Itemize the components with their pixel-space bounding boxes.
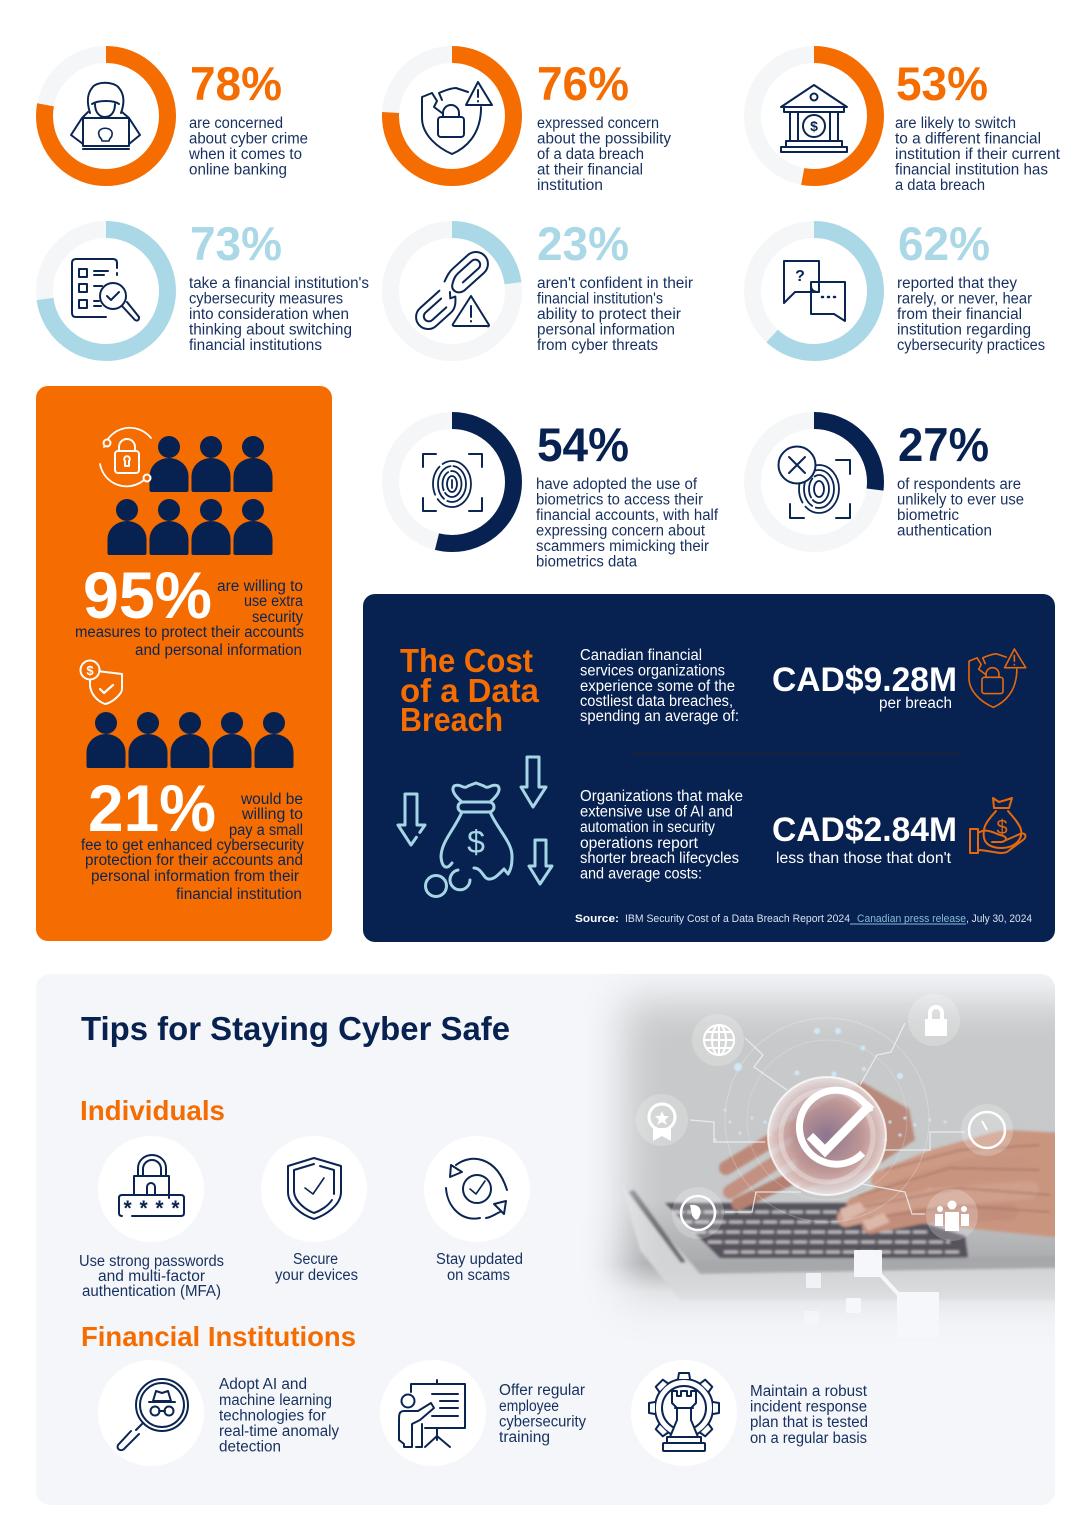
text: 78% description: online banking bbox=[189, 162, 287, 178]
text: 73% description: cybersecurity measures bbox=[189, 290, 343, 308]
text: 54% description: biometrics to access their bbox=[536, 492, 703, 508]
figure 95%: 95% bbox=[83, 558, 212, 632]
stat: 53% likely to switch bbox=[752, 54, 1061, 194]
text: 27% description: authentication bbox=[897, 522, 992, 540]
text: passwords tip bbox=[79, 1253, 224, 1300]
text: AI tip: technologies for bbox=[219, 1408, 326, 1424]
text: less than those that don't: less than those that don't bbox=[776, 850, 952, 867]
text: 54% description: expressing concern about bbox=[536, 522, 706, 540]
text: 95% description: use extra bbox=[244, 593, 303, 610]
text: 21% description: financial institution bbox=[176, 886, 302, 903]
text: 95% description: security bbox=[252, 609, 303, 626]
donut chart 76% bbox=[390, 54, 514, 178]
text: AI tip: Adopt AI and bbox=[219, 1376, 307, 1393]
text: 27% description: unlikely to ever use bbox=[897, 492, 1024, 508]
icon: lock with password: **** bbox=[124, 1197, 180, 1220]
text: 54% description: scammers mimicking their bbox=[536, 538, 709, 555]
panel background bbox=[36, 974, 1055, 1505]
icon: shield with check bbox=[261, 1136, 367, 1242]
text: 23% description: ability to protect their bbox=[537, 306, 681, 323]
icon: question and answer speech bubbles bbox=[784, 261, 845, 321]
text: scams tip: Stay updated bbox=[436, 1251, 523, 1268]
figure 27%: 27% bbox=[898, 418, 989, 471]
text: incident response tip bbox=[750, 1383, 868, 1447]
text: 53% description bbox=[895, 115, 1061, 194]
icon: orange hand holding money bag bbox=[970, 798, 1025, 853]
icon: checklist with magnifier bbox=[72, 259, 139, 321]
text: 54% description: biometrics data bbox=[536, 554, 637, 570]
stat: 73% consider cybersecurity bbox=[44, 217, 369, 354]
text: incident response tip: Maintain a robust bbox=[750, 1383, 868, 1400]
text: 73% description: into consideration when bbox=[189, 306, 349, 323]
panel: tips for staying cyber safe bbox=[36, 960, 1080, 1505]
text: 62% description: cybersecurity practices bbox=[897, 337, 1045, 354]
text: cost intro: spending an average of: bbox=[580, 708, 739, 725]
text: devices tip: Secure bbox=[293, 1251, 338, 1268]
figure 53%: 53% bbox=[896, 57, 988, 110]
donut chart 54% bbox=[390, 420, 514, 544]
text: AI and automation: shorter breach lifecycles bbox=[580, 850, 739, 867]
icon: question and answer speech bubbles: ? bbox=[795, 268, 805, 285]
text: passwords tip: and multi-factor bbox=[98, 1268, 205, 1285]
text: 21% description: protection for their accounts and bbox=[85, 852, 303, 869]
text: 78% description: when it comes to bbox=[188, 146, 302, 163]
stat: 76% data breach concern bbox=[390, 54, 671, 194]
text: 27% description: of respondents are bbox=[897, 476, 1021, 493]
heading: Tips for Staying Cyber Safe: Tips for Staying Cyber Safe bbox=[81, 1010, 510, 1047]
text: 62% description bbox=[897, 275, 1045, 354]
text: AI and automation: operations report bbox=[580, 835, 699, 852]
stat: 27% unlikely to use biometrics bbox=[752, 418, 1024, 544]
text: 21% description: willing to bbox=[241, 806, 303, 823]
icon: bank building with dollar bbox=[781, 85, 847, 152]
tip: strong passwords and MFA bbox=[79, 1136, 224, 1300]
icon: bank building with dollar: $ bbox=[810, 118, 818, 134]
source citation: , July 30, 2024 bbox=[966, 913, 1032, 925]
people icons: 21% group bbox=[86, 712, 294, 768]
panel title: of a Data bbox=[400, 672, 540, 709]
icon: presenter with board bbox=[380, 1360, 486, 1466]
icon: broken chain with warning bbox=[411, 247, 493, 334]
text: 27% description bbox=[897, 476, 1024, 540]
panel title: Breach bbox=[400, 701, 503, 738]
text: cost intro: experience some of the bbox=[580, 678, 735, 695]
text: 62% description: reported that they bbox=[897, 275, 1017, 292]
text: 23% description: personal information bbox=[537, 322, 675, 338]
donut chart 78% bbox=[44, 54, 168, 178]
panel: orange willingness stats bbox=[36, 386, 332, 941]
figure 78%: 78% bbox=[190, 57, 282, 110]
figure 21%: 21% bbox=[88, 771, 216, 845]
donut chart 73% bbox=[44, 230, 168, 352]
text: 95% description: measures to protect their accounts bbox=[75, 624, 304, 641]
text: 73% description: take a financial institution's bbox=[189, 275, 369, 292]
figure CAD$2.84M: CAD$2.84M bbox=[772, 811, 957, 849]
icon: hooded hacker with laptop bbox=[71, 83, 140, 149]
stat: 23% not confident bbox=[390, 217, 693, 354]
text: 78% description: about cyber crime bbox=[189, 130, 308, 148]
text: incident response tip: plan that is tested bbox=[750, 1414, 868, 1431]
text: scams tip: on scams bbox=[447, 1267, 510, 1284]
icon: broken shield with lock bbox=[422, 82, 492, 154]
heading: Financial Institutions: Financial Institutions bbox=[81, 1321, 356, 1352]
text: cost intro: costliest data breaches, bbox=[580, 693, 733, 710]
text: 53% description: to a different financial bbox=[895, 130, 1041, 148]
text: cost intro: Canadian financial bbox=[580, 647, 702, 664]
figure 23%: 23% bbox=[537, 217, 629, 270]
donut chart 27% bbox=[752, 420, 876, 544]
text: 54% description bbox=[536, 476, 719, 570]
text: passwords tip: Use strong passwords bbox=[79, 1253, 224, 1270]
figure CAD$9.28M: CAD$9.28M bbox=[772, 661, 957, 699]
text: passwords tip: authentication (MFA) bbox=[82, 1283, 221, 1300]
text: AI and automation: Organizations that make bbox=[580, 788, 743, 805]
text: AI and automation bbox=[580, 788, 743, 882]
text: 23% description: aren't confident in their bbox=[537, 275, 693, 292]
text: devices tip bbox=[275, 1251, 358, 1284]
text: 21% description: personal information from their bbox=[91, 868, 299, 885]
text: 21% description: would be bbox=[240, 791, 303, 808]
decorative white squares bbox=[804, 1250, 939, 1338]
icon: orange broken shield bbox=[969, 649, 1026, 707]
text: 76% description bbox=[537, 115, 671, 194]
stat: 78% concerned about cyber crime bbox=[44, 54, 308, 178]
text: training tip: cybersecurity bbox=[499, 1414, 586, 1430]
text: 21% description: pay a small bbox=[229, 822, 303, 839]
text: AI tip: machine learning bbox=[219, 1392, 332, 1409]
icon: shield with dollar coin bbox=[80, 660, 122, 704]
panel title bbox=[400, 642, 540, 738]
text: 53% description: a data breach bbox=[895, 177, 985, 194]
text: 76% description: about the possibility bbox=[537, 130, 671, 148]
text: AI and automation: and average costs: bbox=[580, 866, 702, 882]
text: 62% description: rarely, or never, hear bbox=[897, 290, 1032, 308]
text: 76% description: of a data breach bbox=[537, 146, 644, 163]
text: cost intro: services organizations bbox=[580, 662, 725, 680]
text: 62% description: institution regarding bbox=[897, 322, 1031, 338]
text: AI tip: detection bbox=[219, 1438, 281, 1456]
text: devices tip: your devices bbox=[275, 1267, 358, 1284]
people icons: 95% group bbox=[108, 436, 272, 555]
text: 73% description: thinking about switching bbox=[189, 322, 352, 338]
heading: Individuals: Individuals bbox=[80, 1095, 225, 1126]
icon: magnifier with spy bbox=[98, 1360, 204, 1466]
text: 21% description: fee to get enhanced cybersecurity bbox=[81, 837, 304, 854]
source citation bbox=[575, 913, 1032, 925]
tip: secure your devices bbox=[261, 1136, 367, 1284]
text: training tip: Offer regular bbox=[499, 1382, 585, 1399]
donut chart 62% bbox=[752, 230, 876, 352]
icon: fingerprint scan bbox=[423, 454, 482, 511]
text: incident response tip: incident response bbox=[750, 1398, 867, 1416]
text: AI and automation: extensive use of AI and bbox=[580, 804, 733, 820]
icon: gear with chess rook bbox=[631, 1360, 737, 1466]
text: 23% description bbox=[537, 275, 693, 354]
text: 73% description: financial institutions bbox=[189, 337, 322, 354]
icon: money bag with falling arrows: $ bbox=[467, 824, 485, 860]
text: training tip: training bbox=[499, 1429, 550, 1446]
text: 23% description: from cyber threats bbox=[537, 337, 658, 354]
text: 54% description: financial accounts, with half bbox=[536, 507, 719, 524]
text: 53% description: are likely to switch bbox=[895, 115, 1016, 132]
tip: AI anomaly detection bbox=[98, 1360, 339, 1466]
tip: incident response plan bbox=[631, 1360, 868, 1466]
icon: refresh arrows with check bbox=[424, 1136, 530, 1242]
icon: orange hand holding money bag: $ bbox=[996, 817, 1008, 839]
text: AI tip bbox=[219, 1376, 339, 1456]
figure 76%: 76% bbox=[537, 57, 629, 110]
stat: 62% rarely hear bbox=[752, 217, 1045, 354]
text: 76% description: institution bbox=[537, 177, 603, 194]
source citation: Canadian press release bbox=[857, 913, 966, 925]
source citation: IBM Security Cost of a Data Breach Report 2024 bbox=[625, 913, 850, 925]
text: 95% description: and personal information bbox=[135, 642, 302, 659]
text: 76% description: expressed concern bbox=[537, 115, 659, 132]
icon: shield with dollar coin: $ bbox=[86, 663, 94, 678]
text: 95% description: are willing to bbox=[217, 578, 303, 595]
panel background bbox=[363, 594, 1055, 942]
figure 73%: 73% bbox=[190, 217, 282, 270]
text: AI and automation: automation in security bbox=[580, 819, 715, 836]
text: incident response tip: on a regular basis bbox=[750, 1430, 867, 1447]
text: 54% description: have adopted the use of bbox=[536, 476, 698, 493]
stat: 54% adopted biometrics bbox=[390, 418, 719, 570]
text: 53% description: financial institution has bbox=[895, 162, 1048, 178]
text: AI tip: real-time anomaly bbox=[219, 1423, 339, 1440]
tip: stay updated on scams bbox=[424, 1136, 530, 1284]
photo: hands typing on laptop with security icons bbox=[600, 981, 1055, 1312]
panel: the cost of a data breach bbox=[363, 594, 1055, 942]
donut chart 53% bbox=[752, 54, 876, 178]
icon: lock with password bbox=[98, 1136, 204, 1242]
text: 78% description: are concerned bbox=[189, 115, 283, 132]
text: 76% description: at their financial bbox=[537, 162, 643, 178]
text: training tip bbox=[499, 1382, 586, 1446]
tip: employee training bbox=[380, 1360, 586, 1466]
text: training tip: employee bbox=[499, 1398, 559, 1415]
text: per breach: per breach bbox=[879, 695, 952, 712]
icon: padlock in ring bbox=[100, 428, 151, 486]
figure 54%: 54% bbox=[537, 418, 629, 471]
icon: money bag with falling arrows bbox=[398, 757, 552, 896]
text: 21% description bbox=[81, 791, 304, 903]
text: 27% description: biometric bbox=[897, 507, 959, 524]
source citation: Source: bbox=[575, 913, 619, 925]
panel background bbox=[36, 386, 332, 941]
figure 62%: 62% bbox=[898, 217, 990, 270]
text: scams tip bbox=[436, 1251, 523, 1284]
text: 78% description bbox=[188, 115, 308, 178]
icon: fingerprint with cross bbox=[778, 446, 850, 518]
text: cost intro bbox=[580, 647, 739, 725]
text: 23% description: financial institution's bbox=[537, 290, 663, 308]
text: 62% description: from their financial bbox=[897, 306, 1022, 323]
donut chart 23% bbox=[390, 230, 514, 352]
text: 95% description bbox=[75, 578, 304, 659]
text: 53% description: institution if their current bbox=[895, 146, 1061, 163]
panel title: The Cost bbox=[400, 642, 533, 679]
text: 73% description bbox=[189, 275, 369, 354]
